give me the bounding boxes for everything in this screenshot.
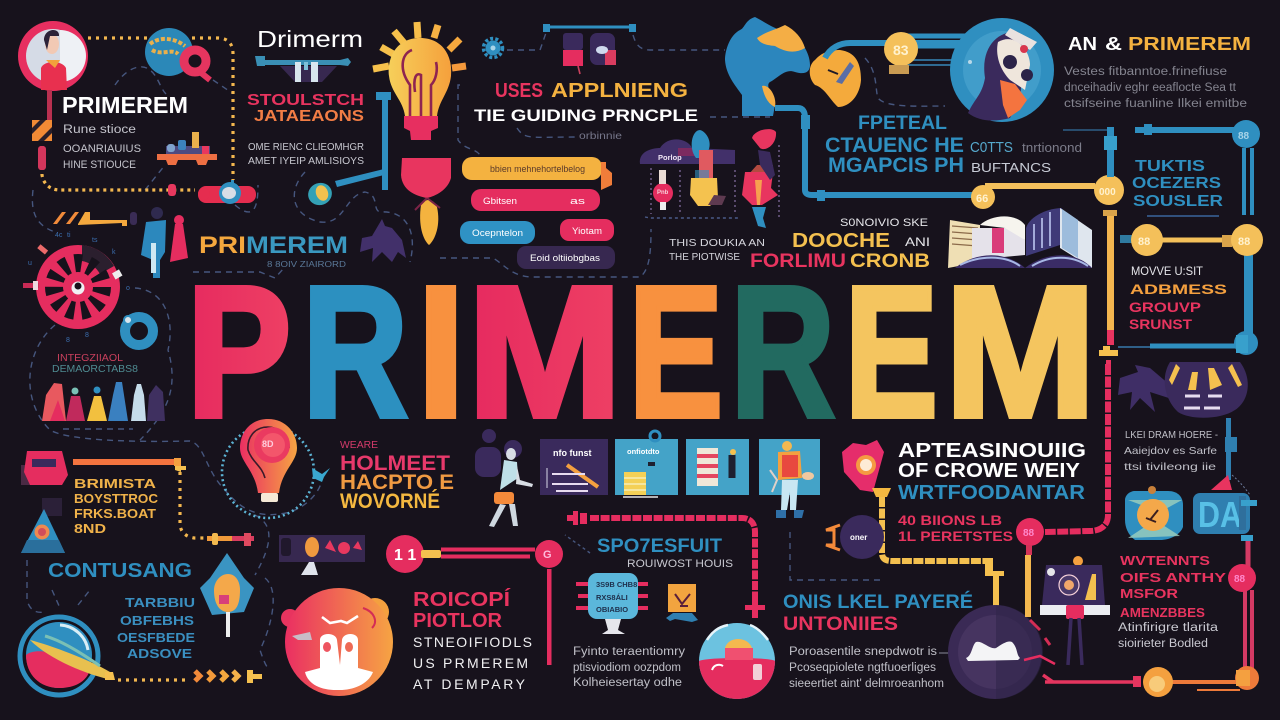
icon: triangle bbox=[21, 498, 65, 553]
icon: red device bbox=[21, 451, 68, 485]
bar: yellow tag bbox=[462, 157, 612, 190]
text: adbmess: MOVVE U:SIT bbox=[1131, 264, 1204, 278]
text: onis lkel: sieeertiet aint' delmroeanhom bbox=[789, 678, 944, 690]
icon: scene of figures bbox=[640, 129, 779, 228]
icon: monitor: 3S9B CHB8 bbox=[596, 580, 637, 589]
pipe: blue frame right: 88 bbox=[1238, 131, 1250, 142]
text: arteasing: OF CROWE WEIY bbox=[898, 460, 1081, 482]
icon: DA card: DA bbox=[1198, 494, 1242, 535]
text: arteasing: APTEASINOUIIG bbox=[898, 440, 1086, 462]
text block: primerem intro: Rune stioce bbox=[63, 124, 136, 136]
text: this doukia: THIS DOUKIA AN bbox=[669, 238, 765, 249]
text block: stoulstch: AMET IYEIP AMLISIOYS bbox=[248, 156, 364, 167]
icon: lightbulb with dotted ring: 8D bbox=[262, 439, 274, 449]
icon: people row bbox=[42, 382, 165, 421]
text: wvtennts: AMENZBBES bbox=[1120, 605, 1205, 620]
text: an & primerem: Vestes fitbanntoe.frinefiuse bbox=[1064, 66, 1227, 78]
icon: blue ring bbox=[124, 316, 153, 345]
pipe: crimson from title to node: 88 bbox=[1023, 528, 1035, 539]
text: arteasing bbox=[898, 440, 1086, 544]
heading: primerem colored: 8 8OIV ZIAIRORD bbox=[267, 259, 346, 269]
icon: orange tile bbox=[666, 584, 698, 622]
icon: hat circle bbox=[939, 605, 1055, 699]
heading: uses applnieng: orbinnie bbox=[579, 131, 623, 142]
icon: profile portrait bbox=[950, 18, 1054, 122]
text: onis lkel: ONIS LKEL PAYERÉ bbox=[783, 591, 973, 613]
text: lkei dram bbox=[1124, 430, 1218, 473]
text: tarbbiu: OBFEBHS bbox=[120, 613, 194, 628]
icon: small yellow bulb bbox=[884, 32, 918, 74]
text: dooche forlimu: CRONB bbox=[850, 251, 930, 272]
icon: small purple badge: oner bbox=[850, 533, 867, 542]
text: fpeteal heading bbox=[825, 113, 1082, 177]
panel: blue stripes bbox=[686, 439, 749, 495]
icon: wheel: 8 bbox=[66, 337, 70, 344]
text: fpeteal heading: CTAUENC HE bbox=[825, 134, 964, 157]
text: an & primerem bbox=[1064, 34, 1251, 110]
pipe: crimson dashed route bbox=[567, 511, 765, 618]
panel: purple chart: nfo funst bbox=[553, 448, 592, 458]
bar: blue tag bbox=[460, 221, 535, 244]
dotted connector: top-left frame bbox=[42, 38, 233, 196]
pipe: yellow horizontal with nodes bbox=[1120, 224, 1263, 256]
text: spo7esfuit bbox=[597, 536, 733, 570]
icon: stripes bbox=[53, 212, 137, 226]
pipe: yellow horizontal with nodes: 88 bbox=[1238, 236, 1250, 248]
bar: crimson short tag bbox=[560, 219, 614, 241]
icon: purple blob bbox=[360, 219, 406, 262]
pipe: yellow horizontal with nodes: 88 bbox=[1138, 236, 1150, 248]
icon: hazard box bbox=[32, 120, 52, 170]
text: body paragraph bbox=[573, 646, 685, 689]
icon: lightbulb with dotted ring bbox=[222, 419, 330, 518]
bar: purple tag bbox=[517, 246, 615, 269]
text: dooche forlimu: FORLIMU bbox=[750, 251, 846, 272]
text: tarbbiu: TARBBIU bbox=[125, 595, 195, 610]
pipe: crimson right with orange base bbox=[1043, 535, 1259, 697]
icon: spiky blob and dome bbox=[1118, 362, 1248, 418]
text: roicopi: US PRMEREM bbox=[413, 655, 528, 671]
text: an & primerem: PRIMEREM bbox=[1128, 34, 1251, 54]
text: tuktis: OCEZERS bbox=[1132, 175, 1221, 192]
bar: crimson tag: Gbitsen bbox=[483, 196, 517, 207]
pipe: orange with dotted line bbox=[73, 458, 254, 546]
pipe: crimson from title to node bbox=[1016, 364, 1108, 617]
title: P bbox=[187, 249, 291, 456]
icon: blue person and pink cone bbox=[141, 207, 188, 278]
icon: wheel: 4c bbox=[55, 232, 63, 239]
bar: crimson short tag: Yiotam bbox=[572, 226, 602, 237]
icon: top figures bbox=[543, 24, 636, 74]
text: wvtennts: Atinfirigre tlarita bbox=[1118, 622, 1219, 634]
text: adbmess bbox=[1129, 264, 1227, 332]
text: an & primerem: & bbox=[1105, 34, 1122, 54]
text: tuktis: TUKTIS bbox=[1135, 158, 1205, 175]
icon: wheel: 8 bbox=[85, 332, 89, 339]
panel: blue note bbox=[615, 431, 678, 497]
heading: uses applnieng: USES bbox=[495, 80, 543, 102]
title: I bbox=[417, 247, 465, 456]
text: arteasing: WRTFOODANTAR bbox=[898, 482, 1086, 504]
text block: primerem intro: OOANRIAUIUS bbox=[63, 143, 141, 155]
icon: monitor bbox=[576, 573, 648, 634]
text: brimista: 8ND bbox=[74, 521, 106, 536]
panel: blue figure bbox=[759, 439, 820, 518]
heading: drimerm: Drimerm bbox=[257, 26, 363, 52]
icon: numbered circle and link: 1 1 bbox=[394, 547, 416, 564]
pipe: crimson right with orange base: 88 bbox=[1234, 574, 1246, 585]
panel: purple chart bbox=[540, 439, 608, 495]
text: tuktis: SOUSLER bbox=[1133, 193, 1224, 210]
icon: scene of figures: Pnb bbox=[657, 190, 669, 196]
icon: scene of figures: Porlop bbox=[658, 153, 682, 162]
title: R bbox=[303, 249, 408, 456]
bar: purple tag: Eoid oltiiobgbas bbox=[530, 253, 600, 264]
text block: stoulstch: JATAEAONS bbox=[254, 108, 364, 125]
text: tarbbiu bbox=[117, 595, 195, 661]
text: fpeteal heading: C0TTS bbox=[970, 139, 1013, 156]
text: integrations caption bbox=[52, 353, 138, 375]
text: body paragraph: Fyinto teraentiomry bbox=[573, 646, 685, 658]
title bbox=[187, 247, 1096, 456]
icon: laptop with person bbox=[1040, 556, 1110, 665]
pipe: yellow connector with circles bbox=[971, 175, 1124, 366]
text: brimista bbox=[74, 476, 159, 536]
text block: stoulstch: OME RIENC CLIEOMHGR bbox=[248, 142, 364, 153]
text: an & primerem: ctsifseine fuanline Ilkei emitbe bbox=[1064, 98, 1247, 110]
icon: wheel: k bbox=[112, 249, 116, 256]
icon: pink smiley bbox=[281, 588, 393, 696]
icon: globe and magnifier bbox=[145, 28, 210, 80]
text: body paragraph: Kolheiesertay odhe bbox=[573, 677, 682, 689]
pipe: yellow connector with circles: 000 bbox=[1099, 187, 1116, 198]
text: wvtennts: WVTENNTS bbox=[1120, 553, 1210, 568]
title: M bbox=[945, 248, 1096, 455]
text: adbmess: SRUNST bbox=[1129, 316, 1192, 332]
pipe: yellow connector with circles: 66 bbox=[976, 193, 988, 205]
icon: submarine bbox=[198, 180, 256, 204]
icon: wheel: ti bbox=[67, 232, 71, 239]
heading: uses applnieng: APPLNIENG bbox=[551, 80, 688, 102]
text block: primerem intro bbox=[62, 92, 188, 171]
icon: DA card bbox=[1193, 493, 1257, 541]
text: adbmess: ADBMESS bbox=[1130, 281, 1227, 297]
text: dooche forlimu: DOOCHE bbox=[792, 230, 890, 252]
icon: lightbulb bbox=[373, 22, 466, 140]
text: integrations caption: DEMAORCTABS8 bbox=[52, 364, 138, 375]
text: integrations caption: INTEGZIIAOL bbox=[57, 353, 123, 364]
text: dooche forlimu: ANI bbox=[905, 235, 930, 249]
text: arteasing: 1L PERETSTES bbox=[898, 528, 1013, 544]
icon: drone bbox=[255, 56, 351, 82]
text: lkei dram: Aaiejdov es Sarfe bbox=[1124, 445, 1217, 457]
text: fpeteal heading: tnrtionond bbox=[1022, 140, 1082, 155]
title: E bbox=[629, 248, 723, 455]
text: onis lkel: Pcoseqpiolete ngtfuoerliges bbox=[789, 662, 936, 674]
text: this doukia: THE PIOTWISE bbox=[669, 252, 740, 263]
text: weare holmeet: WEARE bbox=[340, 440, 378, 451]
text: roicopi: AT DEMPARY bbox=[413, 676, 526, 692]
text: wvtennts: sioirieter Bodled bbox=[1118, 638, 1208, 650]
text: fpeteal heading: BUFTANCS bbox=[971, 160, 1051, 175]
connector: dotted with chevrons bbox=[118, 670, 262, 683]
icon: pentagon pin bbox=[200, 553, 254, 637]
text block: primerem intro: PRIMEREM bbox=[62, 92, 188, 118]
text: lkei dram: ttsi tivileong iie bbox=[1124, 461, 1216, 473]
text: spo7esfuit: ROUIWOST HOUIS bbox=[627, 558, 733, 570]
icon: monitor: OBIABIO bbox=[596, 605, 628, 614]
icon: wheel bbox=[23, 232, 130, 344]
text: an & primerem: AN bbox=[1068, 34, 1097, 54]
icon: snow ball bbox=[699, 623, 775, 699]
title: R bbox=[731, 248, 835, 456]
text: roicopi bbox=[413, 588, 532, 692]
text: roicopi: STNEOIFIODLS bbox=[413, 634, 532, 650]
text block: stoulstch: STOULSTCH bbox=[247, 92, 364, 109]
pipe: blue connector bbox=[775, 36, 972, 201]
bar: blue tag: Ocepntelon bbox=[472, 228, 523, 239]
icon: small purple badge bbox=[826, 515, 884, 559]
text: weare holmeet: HACPTO E bbox=[340, 471, 454, 494]
text: onis lkel bbox=[783, 591, 973, 690]
text: spo7esfuit: SPO7ESFUIT bbox=[597, 536, 722, 557]
heading: primerem colored bbox=[199, 232, 348, 269]
pipe: blue frame right bbox=[1063, 120, 1260, 355]
text: this doukia bbox=[669, 238, 765, 263]
text: lkei dram: LKEI DRAM HOERE - bbox=[1125, 430, 1218, 441]
text: wvtennts bbox=[1118, 553, 1226, 650]
text: fpeteal heading: FPETEAL bbox=[858, 113, 947, 134]
heading: uses applnieng: TIE GUIDING PRNCPLE bbox=[474, 106, 698, 125]
icon: projector bbox=[279, 535, 365, 575]
text: roicopi: ROICOPÍ bbox=[413, 588, 511, 611]
icon: shelf bbox=[157, 132, 217, 165]
icon: wheel: ts bbox=[92, 237, 98, 244]
text: dooche forlimu: S0NOIVIO SKE bbox=[840, 217, 928, 229]
text: contusang: CONTUSANG bbox=[48, 560, 192, 582]
pipe: blue drop stem bbox=[1211, 418, 1250, 495]
text: body paragraph: ptisviodiom oozpdom bbox=[573, 662, 681, 674]
text: weare holmeet: WOVORNÉ bbox=[340, 490, 440, 513]
icon: numbered circle and link bbox=[386, 535, 441, 573]
icon: blue mallet bbox=[305, 92, 391, 208]
text block: stoulstch bbox=[247, 92, 364, 167]
panel: blue note: onfiotdto bbox=[627, 447, 660, 456]
text: tarbbiu: OESFBEDE bbox=[117, 630, 195, 645]
icon: wheel: o bbox=[126, 285, 130, 292]
icon: gear bbox=[484, 38, 502, 58]
text: brimista: BOYSTTROC bbox=[74, 491, 159, 506]
text: onis lkel: Poroasentile snepdwotr is bbox=[789, 646, 937, 658]
icon: wheel: u bbox=[28, 260, 32, 267]
pipe: crimson with node: G bbox=[543, 549, 552, 561]
text: weare holmeet bbox=[340, 440, 454, 513]
heading: primerem colored: PRI bbox=[199, 232, 246, 259]
bar: yellow tag: bbien mehnehortelbelog bbox=[490, 164, 585, 174]
text: arteasing: 40 BIIONS LB bbox=[898, 512, 1002, 528]
text: tarbbiu: ADSOVE bbox=[127, 646, 192, 661]
icon: small yellow bulb: 83 bbox=[893, 42, 909, 58]
text: weare holmeet: HOLMEET bbox=[340, 452, 450, 475]
bar: crimson tag bbox=[471, 189, 600, 211]
text: wvtennts: MSFOR bbox=[1120, 586, 1179, 601]
icon: portrait bbox=[18, 21, 88, 120]
text: adbmess: GROUVP bbox=[1129, 299, 1201, 315]
bar: crimson tag: as bbox=[570, 196, 585, 207]
text: roicopi: PIOTLOR bbox=[413, 610, 503, 632]
icon: blue map bbox=[725, 17, 810, 116]
icon: orange shape bbox=[810, 50, 861, 107]
icon: monitor: RXS8ÁLI bbox=[596, 593, 628, 602]
text: onis lkel: UNTONIIES bbox=[783, 614, 898, 635]
icon: face tile bbox=[1125, 486, 1183, 540]
text: dooche forlimu bbox=[750, 217, 930, 272]
title: E bbox=[845, 247, 938, 456]
text: brimista: FRKS.BOAT bbox=[74, 506, 156, 521]
icon: open book with buildings bbox=[948, 208, 1092, 268]
title: M bbox=[468, 249, 622, 456]
icon: goblet funnel bbox=[401, 158, 451, 245]
text: fpeteal heading: MGAPCIS PH bbox=[828, 154, 964, 177]
icon: globe with comet bbox=[20, 617, 115, 695]
pipe: yellow dashed route bbox=[882, 497, 1004, 606]
text block: primerem intro: HINE STIOUCE bbox=[63, 159, 136, 171]
text: an & primerem: dnceihadiv eghr eeaflocte Sea tt bbox=[1064, 82, 1237, 94]
text: wvtennts: OIFS ANTHY bbox=[1120, 570, 1226, 585]
icon: seated person bbox=[475, 429, 533, 527]
text: brimista: BRIMISTA bbox=[74, 476, 157, 491]
pipe: crimson with node bbox=[441, 540, 563, 665]
text: tuktis bbox=[1132, 158, 1224, 216]
heading: uses applnieng bbox=[474, 80, 698, 142]
icon: pink funnel bbox=[842, 440, 891, 497]
heading: primerem colored: MEREM bbox=[246, 232, 348, 259]
